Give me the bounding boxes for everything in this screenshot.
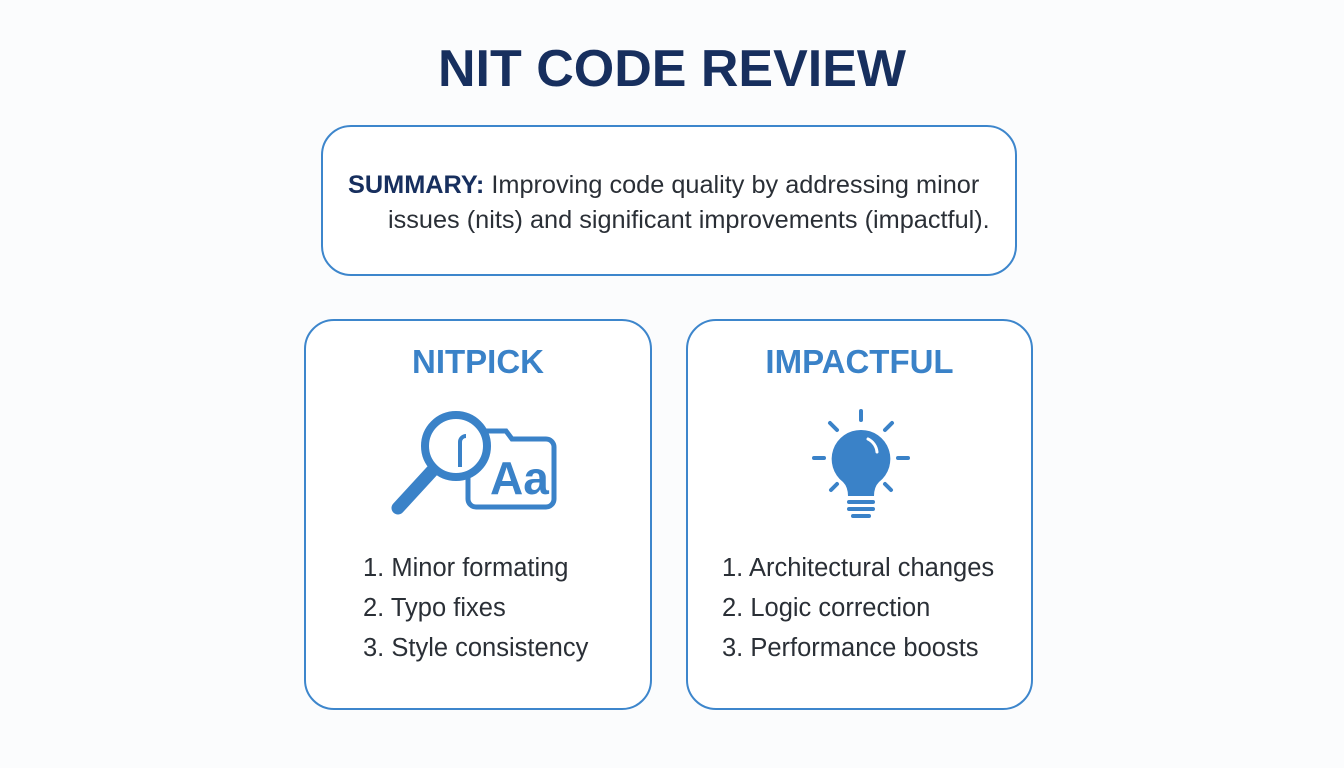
summary text: issues (nits) and significant improvements (impactful). xyxy=(388,206,990,234)
list: nitpick xyxy=(363,554,588,662)
list: impactful: 1. Architectural changes xyxy=(722,554,994,582)
summary text: SUMMARY: Improving code quality by addressing minor xyxy=(348,171,979,199)
list: impactful: 3. Performance boosts xyxy=(722,634,979,662)
icon: light bulb xyxy=(812,409,910,518)
summary text xyxy=(348,171,990,234)
summary box xyxy=(321,125,1017,276)
list: nitpick: 1. Minor formating xyxy=(363,554,568,582)
list: impactful: 2. Logic correction xyxy=(722,594,930,622)
icon: magnifier with Aa: Aa xyxy=(490,452,549,504)
title: NIT CODE REVIEW xyxy=(438,40,906,98)
icon: magnifier with Aa xyxy=(392,411,556,514)
heading: impactful: IMPACTFUL xyxy=(765,343,954,380)
panel: nitpick xyxy=(304,319,652,710)
list: nitpick: 2. Typo fixes xyxy=(363,594,506,622)
panel: impactful xyxy=(686,319,1033,710)
list: nitpick: 3. Style consistency xyxy=(363,634,588,662)
heading: nitpick: NITPICK xyxy=(412,343,544,380)
list: impactful xyxy=(722,554,994,662)
